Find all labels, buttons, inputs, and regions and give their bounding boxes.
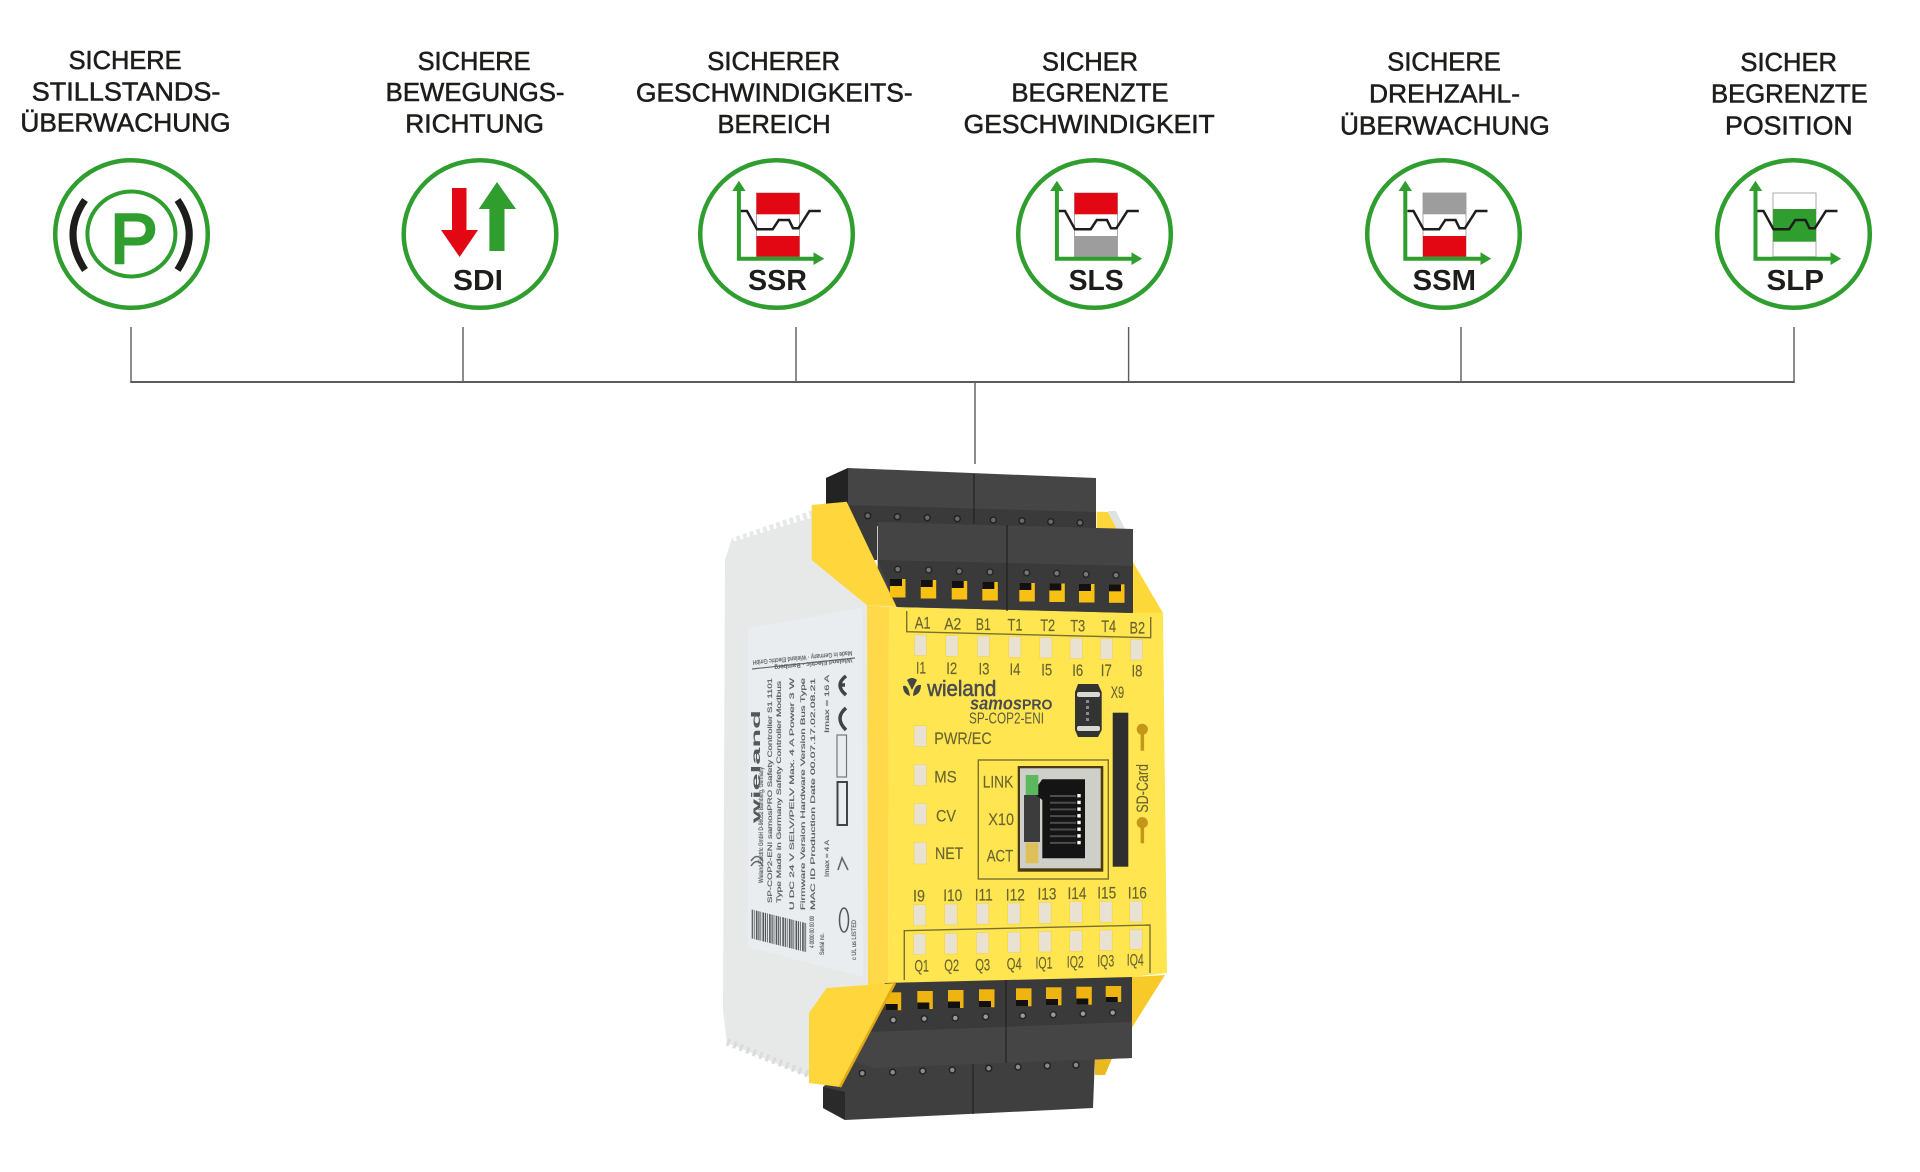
housing side (723, 510, 868, 1077)
heading: Sichere Bewegungsrichtung: RICHTUNG (405, 111, 544, 139)
heading: Sichere Stillstandsüberwachung: STILLSTANDS- (32, 79, 220, 107)
status labels: CV (936, 807, 957, 826)
serial number text: Serial no. (819, 933, 826, 955)
terminal labels A1 to B2: A2 (944, 614, 961, 633)
heading: Sicher begrenzte Geschwindigkeit (964, 49, 1215, 139)
yellow lower right chamfer (1132, 975, 1165, 1028)
RJ45 port (1018, 766, 1103, 872)
input labels I9 to I16: I11 (975, 885, 993, 904)
side label sticker: U DC 24 V SELV/PELV Max. 4 A Power 3 W (789, 676, 796, 910)
heading: Sichere Bewegungsrichtung: BEWEGUNGS- (386, 79, 564, 107)
X10 labels: ACT (987, 847, 1013, 866)
input labels I1 to I8: I6 (1072, 661, 1083, 680)
terminal labels A1 to B2: B1 (976, 615, 991, 634)
icon: SLP limited position (1717, 160, 1870, 308)
icon: SLP limited position: SLP (1766, 265, 1824, 297)
input labels I9 to I16: I12 (1006, 885, 1025, 904)
samosPRO wordmark: samos (970, 693, 1022, 713)
yellow right shoulder (1133, 562, 1163, 613)
icon: SSR speed range (700, 160, 853, 308)
input labels I1 to I8: I1 (916, 658, 926, 677)
SD-Card label: SD-Card (1133, 764, 1152, 813)
heading: Sichere Drehzahlüberwachung (1340, 49, 1550, 140)
status labels: MS (934, 768, 957, 787)
front lower connector (850, 977, 1132, 1068)
LED row I1 to I8 (914, 635, 1143, 660)
SD keyhole bottom (1137, 817, 1148, 843)
rear lower connector (823, 1056, 1095, 1120)
side label sticker: Made in Germany · Wieland Electric GmbH (752, 649, 852, 666)
housing vent fins (727, 514, 812, 1074)
X10 labels: X10 (988, 810, 1014, 829)
icon: parking / standstill (55, 160, 208, 308)
side label sticker: Imax = 16 A (824, 674, 831, 733)
side label sticker: c UL us LISTED (851, 920, 858, 960)
serial number text: 4 0000 00 00 00 (809, 916, 816, 948)
side label sticker: MAC ID Production Date 00.07.17.02.08.21 (810, 677, 817, 910)
side label sticker: Type Made in Germany Safety Controller Modbus (776, 680, 783, 903)
SD keyhole top (1137, 724, 1148, 751)
terminal labels A1 to B2 (915, 613, 1145, 637)
output labels Q1 to IQ4: Q3 (975, 955, 990, 974)
heading: Sichere Stillstandsüberwachung (20, 47, 231, 138)
icon: SSR speed range: SSR (748, 265, 807, 297)
input labels I1 to I8: I8 (1132, 662, 1142, 681)
output bracket (904, 925, 1150, 980)
rear upper connector (826, 468, 1096, 560)
serial number text (809, 916, 826, 955)
yellow side strip (867, 605, 889, 990)
output labels Q1 to IQ4: Q4 (1007, 954, 1022, 973)
icon: wieland logo mark (903, 678, 921, 696)
X10 labels: LINK (983, 772, 1014, 791)
input labels I9 to I16: I16 (1128, 883, 1147, 902)
side label sticker: Firmware Version Hardware Version Bus Type (800, 677, 807, 910)
heading: Sicher begrenzte Geschwindigkeit: SICHER (1042, 49, 1138, 77)
side label sticker (748, 608, 863, 977)
status labels (934, 729, 992, 863)
LINK LED (1026, 775, 1038, 795)
barcode (752, 924, 807, 938)
input labels I1 to I8: I5 (1041, 660, 1052, 679)
status LEDs (914, 726, 927, 864)
input labels I9 to I16: I13 (1038, 885, 1056, 904)
heading: Sicher begrenzte Geschwindigkeit: GESCHWINDIGKEIT (964, 111, 1215, 139)
heading: Sicherer Geschwindigkeitsbereich: GESCHWINDIGKEITS- (636, 80, 913, 108)
side label sticker: SP-COP2-ENI samosPRO Safety Controller S1 1101 (767, 677, 774, 903)
input labels I1 to I8: I2 (946, 659, 957, 678)
input labels I1 to I8: I4 (1010, 660, 1020, 679)
output labels Q1 to IQ4: IQ3 (1097, 952, 1114, 971)
terminal labels A1 to B2: B2 (1130, 618, 1145, 637)
LED row Q1 to IQ4 (913, 929, 1142, 955)
samosPRO wordmark: PRO (1022, 696, 1053, 713)
status labels: PWR/EC (934, 729, 992, 748)
icon: SSM speed monitor: SSM (1413, 265, 1476, 297)
heading: Sichere Stillstandsüberwachung: SICHERE (69, 47, 182, 75)
heading: Sicherer Geschwindigkeitsbereich: SICHERER (707, 48, 840, 76)
input labels I1 to I8 (916, 658, 1142, 681)
top terminal bracket (907, 611, 1151, 638)
upper right yellow tab (1097, 512, 1117, 529)
heading: Sicher begrenzte Position: POSITION (1725, 112, 1853, 140)
X10 labels (983, 772, 1014, 866)
X10 box outline (978, 760, 1108, 879)
heading: Sicher begrenzte Position: SICHER (1740, 49, 1837, 77)
terminal labels A1 to B2: T3 (1070, 617, 1085, 636)
input labels I1 to I8: I3 (978, 660, 990, 679)
heading: Sichere Stillstandsüberwachung: ÜBERWACHUNG (20, 110, 231, 138)
icon: SDI direction arrows (404, 160, 556, 308)
ACT LED (1026, 843, 1038, 863)
white clip, upper right (1108, 511, 1125, 529)
terminal labels A1 to B2: T4 (1101, 617, 1116, 636)
wieland wordmark: wieland (926, 676, 996, 701)
front upper connector (878, 522, 1133, 613)
connector lines (130, 327, 1795, 464)
input labels I9 to I16: I14 (1068, 884, 1086, 903)
chamfer edge (840, 983, 895, 1087)
icon: SSM speed monitor (1367, 160, 1520, 308)
product: samosPRO safety controller (723, 468, 1167, 1120)
yellow front face (888, 607, 1167, 990)
terminal labels A1 to B2: T1 (1008, 616, 1022, 635)
icon: SDI direction arrows: SDI (453, 265, 503, 297)
side label sticker: wieland (749, 710, 763, 826)
heading: Sicher begrenzte Position (1711, 49, 1868, 140)
output labels Q1 to IQ4: Q2 (944, 956, 959, 975)
status labels: NET (935, 844, 963, 863)
input labels I9 to I16: I9 (913, 887, 925, 906)
icon: SLS limited speed (1018, 160, 1171, 308)
input labels I9 to I16: I15 (1097, 883, 1116, 902)
icon: SLS limited speed: SLS (1069, 265, 1124, 297)
output labels Q1 to IQ4 (914, 951, 1144, 976)
heading: Sichere Drehzahlüberwachung: ÜBERWACHUNG (1340, 112, 1550, 140)
output labels Q1 to IQ4: IQ1 (1036, 953, 1052, 972)
heading: Sicherer Geschwindigkeitsbereich (636, 48, 913, 139)
terminal labels A1 to B2: T2 (1040, 616, 1055, 635)
model label: SP-COP2-ENI (969, 710, 1044, 727)
heading: Sicher begrenzte Position: BEGRENZTE (1711, 81, 1868, 109)
LED row I9 to I16 (913, 901, 1142, 926)
samosPRO wordmark (970, 693, 1053, 713)
yellow lower left chamfer (809, 983, 895, 1087)
side label sticker: Wieland Electric · Bamberg (774, 656, 852, 670)
SD card slot (1113, 713, 1128, 867)
output labels Q1 to IQ4: IQ2 (1067, 953, 1084, 972)
mini USB port X9 (1075, 684, 1102, 737)
heading: Sichere Bewegungsrichtung: SICHERE (418, 48, 531, 76)
X9 label: X9 (1111, 683, 1124, 702)
output labels Q1 to IQ4: IQ4 (1127, 951, 1144, 970)
yellow upper left chamfer (812, 502, 897, 607)
side label sticker: Imax = 4 A (824, 839, 831, 877)
heading: Sicherer Geschwindigkeitsbereich: BEREICH (718, 111, 831, 139)
lower right yellow tab (1095, 1056, 1113, 1075)
heading: Sichere Drehzahlüberwachung: SICHERE (1387, 49, 1501, 77)
heading: Sicher begrenzte Geschwindigkeit: BEGRENZTE (1011, 80, 1169, 108)
icon: parking / standstill: P (110, 200, 158, 278)
input labels I9 to I16 (913, 883, 1147, 906)
heading: Sichere Bewegungsrichtung (386, 48, 564, 139)
input labels I1 to I8: I7 (1101, 661, 1112, 680)
output labels Q1 to IQ4: Q1 (914, 957, 929, 976)
heading: Sichere Drehzahlüberwachung: DREHZAHL- (1369, 80, 1520, 108)
terminal labels A1 to B2: A1 (915, 613, 931, 632)
input labels I9 to I16: I10 (943, 886, 962, 905)
side label sticker: Wieland Electric GmbH D-96052 Bamberg, Germany (758, 766, 765, 883)
